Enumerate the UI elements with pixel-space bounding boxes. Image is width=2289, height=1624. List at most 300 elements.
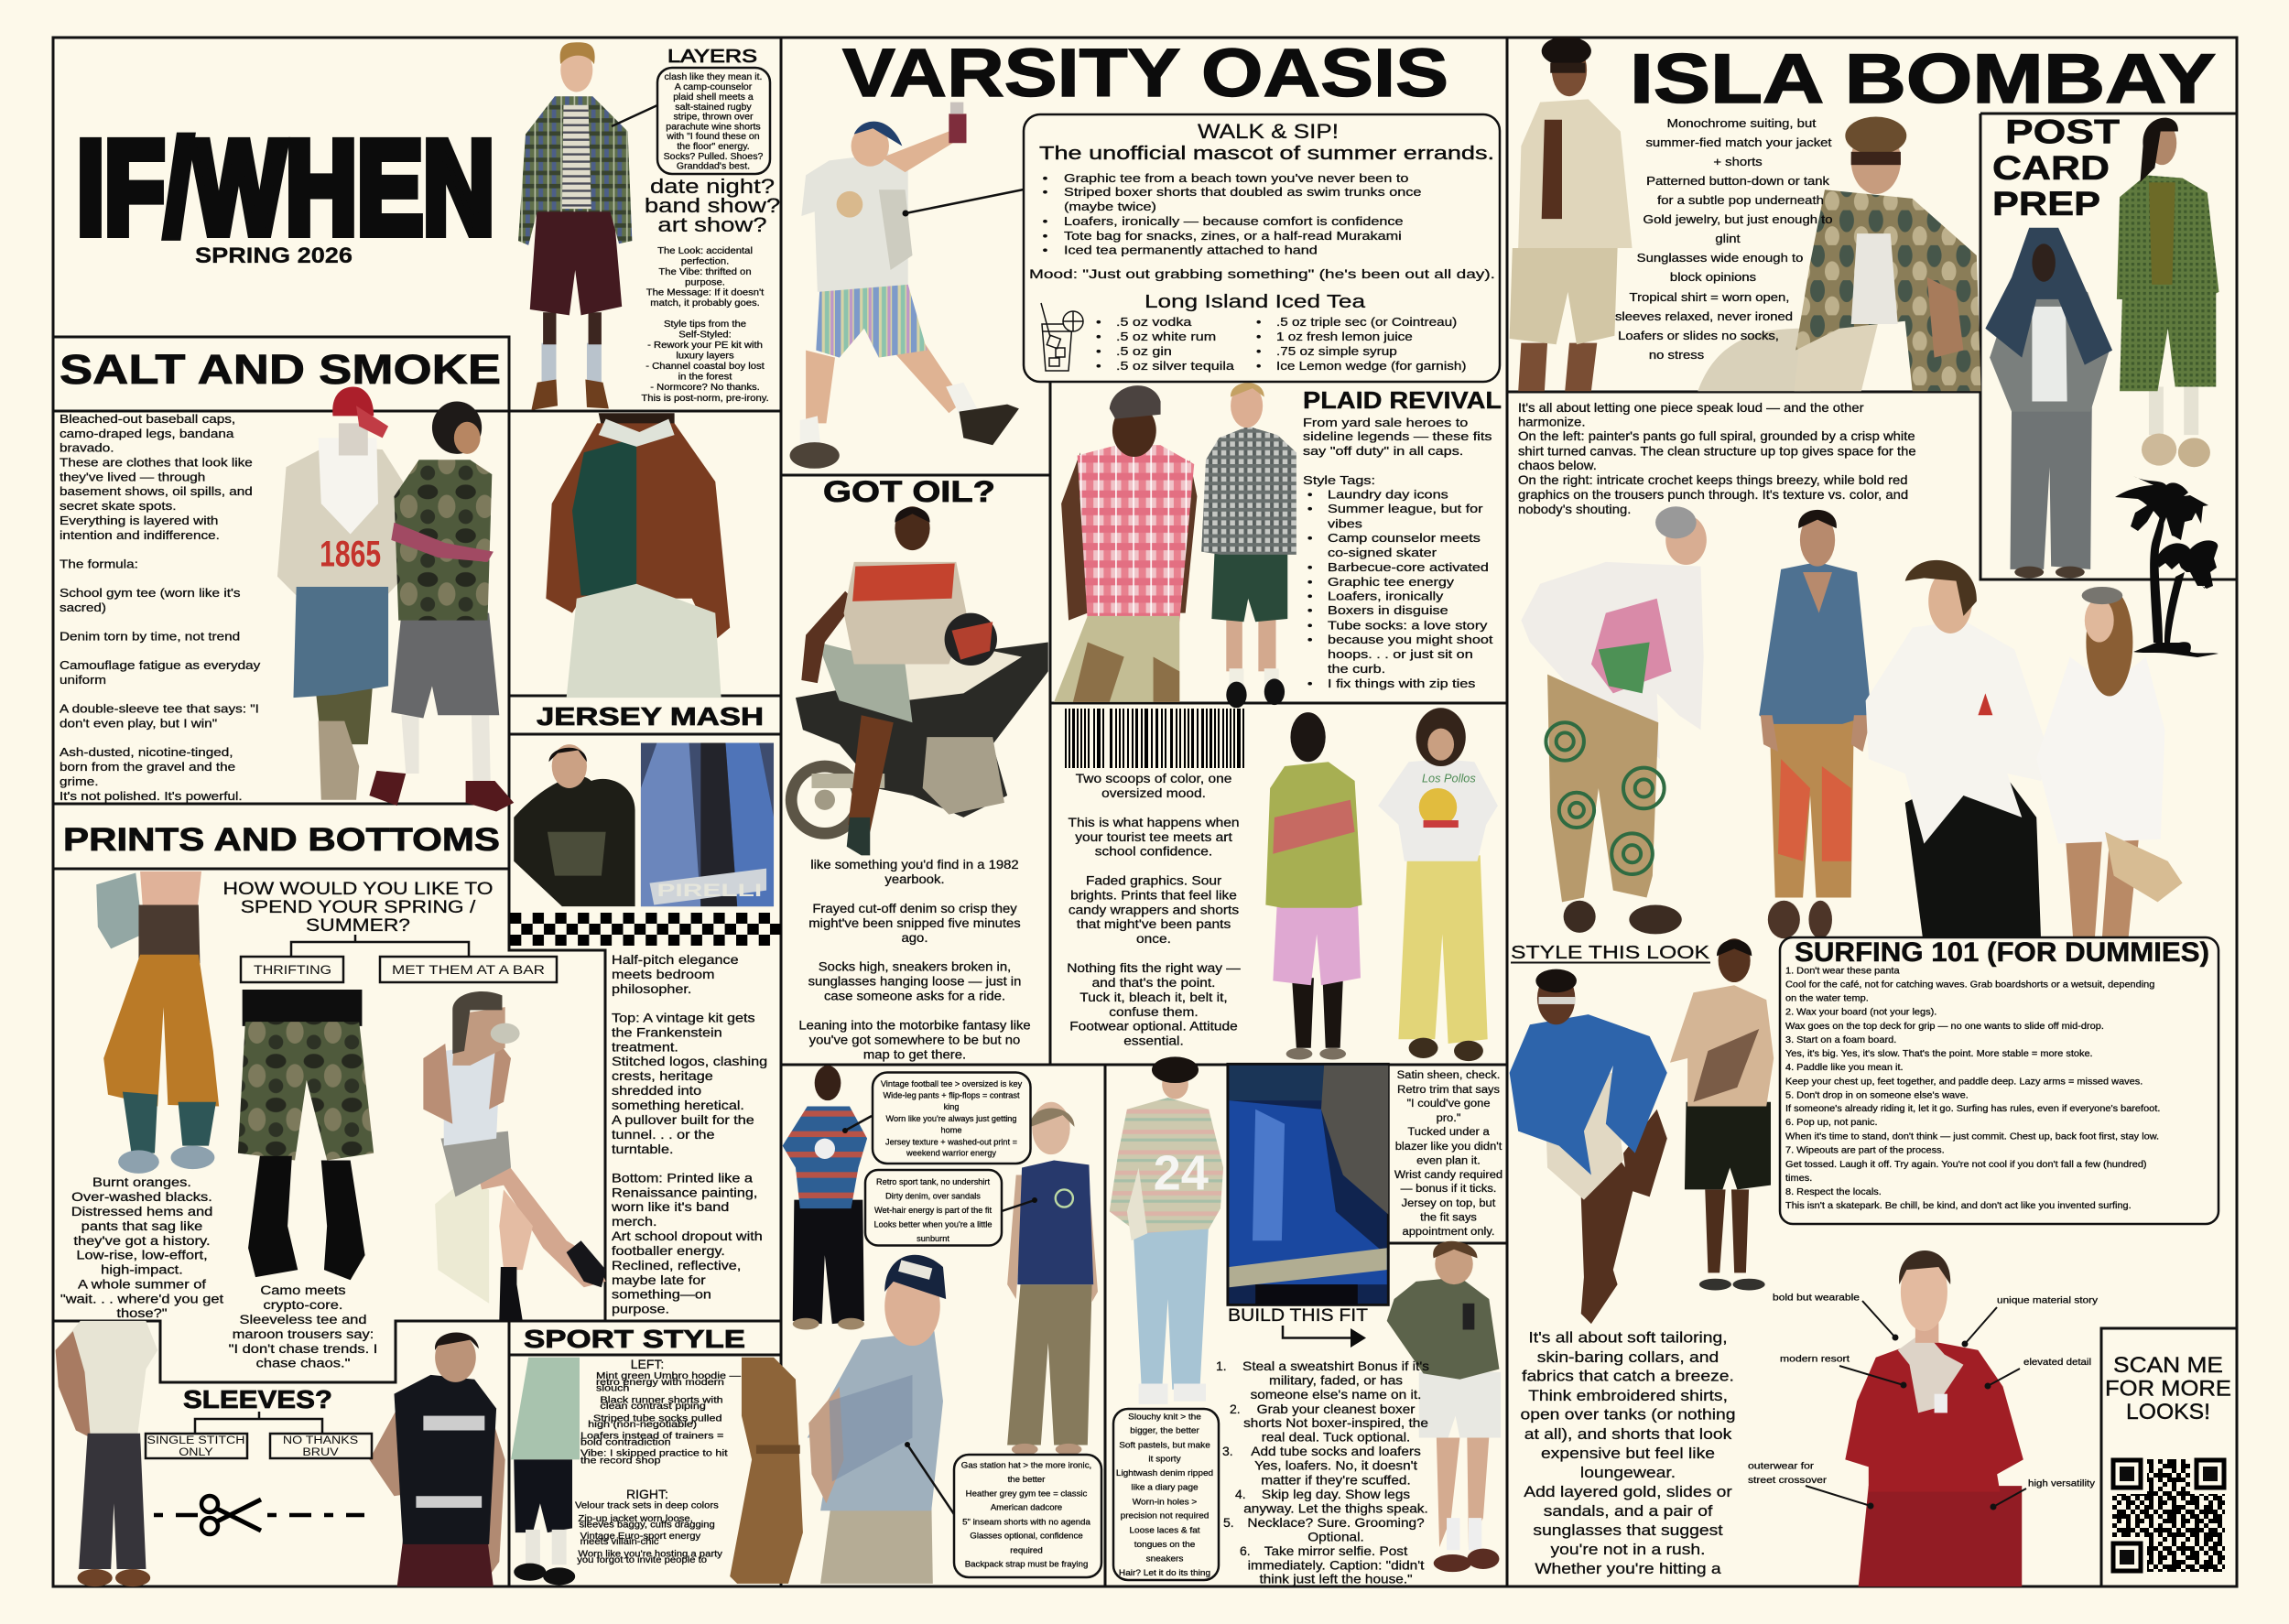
text: salt and smoke body: camo-draped legs, bandana	[60, 428, 233, 441]
text: one piece speak loud: nobody's shouting.	[1518, 503, 1631, 517]
callout: slouchy knit: Hair? Let it do its thing	[1119, 1568, 1210, 1578]
option: no thanks bruv: BRUV	[302, 1445, 339, 1458]
left lines: Striped tube socks pulled	[593, 1414, 721, 1424]
text: soft tailoring: skin-baring collars, and	[1537, 1348, 1719, 1366]
option: met them at a bar: MET THEM AT A BAR	[392, 962, 545, 977]
figure: spiral painted trousers	[1521, 506, 1707, 934]
tips: Keep your chest up, feet together, and paddle deep. Lazy arms = missed waves.	[1785, 1077, 2143, 1087]
text: burnt oranges: "wait. . . where'd you get	[60, 1293, 224, 1306]
heading: post card prep: POST	[2005, 114, 2120, 150]
text: plaid revival body: because you might shoot	[1328, 633, 1492, 647]
text: half-pitch elegance: turntable.	[612, 1143, 674, 1157]
icon: palm trees	[2115, 476, 2218, 657]
callout: retro sport tank: Retro sport tank, no undershirt	[876, 1177, 990, 1186]
text: plaid revival body: the curb.	[1328, 663, 1385, 677]
step numbers: 3.	[1222, 1444, 1233, 1458]
callout: slouchy knit: it sporty	[1148, 1455, 1181, 1464]
left lines: Loafers instead of trainers =	[580, 1432, 724, 1441]
box text: parachute wine shorts	[666, 123, 761, 132]
text: salt and smoke body: uniform	[60, 674, 106, 687]
heading: date night band show art show: band show?	[645, 195, 780, 217]
right lines: Worn like you're hosting a party	[578, 1549, 723, 1559]
text: half-pitch elegance: tunnel. . . or the	[612, 1129, 715, 1142]
text: two scoops: essential.	[1123, 1034, 1184, 1048]
text: satin sheen	[1394, 1068, 1502, 1238]
icon: iced tea glass	[1041, 303, 1083, 371]
text: soft tailoring: at all), and shorts that look	[1524, 1425, 1732, 1443]
text: camo meets crypto-core: crypto-core.	[264, 1298, 342, 1313]
figure: mint hoodie and shorts	[511, 1358, 580, 1586]
panel: surfing 101	[1780, 937, 2218, 1224]
text: soft tailoring: expensive but feel like	[1541, 1445, 1715, 1462]
figure: drinking man with tote	[423, 991, 606, 1321]
text: salt and smoke body: secret skate spots.	[60, 500, 176, 514]
heading: scan me: LOOKS!	[2126, 1400, 2210, 1424]
callout: layers	[612, 47, 770, 174]
option: single stitch only: ONLY	[179, 1445, 213, 1458]
callout: gas station hat	[905, 1442, 1101, 1577]
option: met them at a bar	[380, 957, 557, 982]
text: salt and smoke body: born from the gravel and the	[60, 761, 235, 774]
text: monochrome suiting: block opinions	[1670, 271, 1756, 284]
text: monochrome suiting: for a subtle pop underneath	[1657, 194, 1824, 207]
text: plaid revival body: Tube socks: a love story	[1328, 620, 1488, 633]
step text: someone else's name on it.	[1251, 1389, 1421, 1402]
text: the look and style tips: Self-Styled:	[678, 330, 732, 340]
figure: white shirt and black trousers	[1866, 560, 2051, 937]
step numbers: 4.	[1235, 1487, 1246, 1501]
figure: layers boy in plaid	[518, 42, 632, 410]
text: half-pitch elegance: maybe late for	[612, 1274, 706, 1288]
box text: plaid shell meets a	[673, 93, 754, 103]
text: two scoops: school confidence.	[1095, 845, 1212, 859]
text: the look and style tips: The Vibe: thrifted on	[658, 267, 752, 277]
figure: striped football tee	[783, 1066, 867, 1329]
question: HOW WOULD YOU LIKE TO	[223, 880, 493, 899]
callout: vintage football tee: Wide-leg pants + flip-flops = contrast	[883, 1091, 1020, 1100]
box text: Socks? Pulled. Shoes?	[664, 152, 764, 162]
box text: Granddad's best.	[677, 162, 750, 171]
left lines: slouch	[596, 1384, 629, 1393]
bullets: •	[1043, 186, 1047, 200]
text: satin sheen: — bonus if it ticks.	[1401, 1182, 1496, 1195]
figure: grey plaid shirt and green shorts	[1201, 383, 1296, 708]
text: camo meets crypto-core: Camo meets	[260, 1283, 346, 1298]
text: plaid revival body: •	[1307, 561, 1313, 575]
figure: woman in white blouse with bag	[2036, 587, 2183, 937]
text: burnt oranges: high-impact.	[101, 1263, 183, 1277]
text: salt and smoke body: they've lived — through	[60, 471, 205, 484]
text: monochrome suiting: Tropical shirt = worn open,	[1630, 291, 1789, 304]
text: salt and smoke body: Denim torn by time, not trend	[60, 630, 240, 644]
text: two scoops: Nothing fits the right way —	[1067, 962, 1241, 976]
callout: gas station hat: required	[1010, 1545, 1043, 1554]
heading: varsity oasis: VARSITY OASIS	[842, 35, 1448, 111]
figure: pink plaid sleeveless	[1054, 385, 1197, 702]
text: half-pitch elegance	[611, 954, 767, 1316]
labels: bold but wearable	[1773, 1293, 1860, 1304]
text: half-pitch elegance: Top: A vintage kit gets	[612, 1012, 755, 1025]
heading: jersey mash: JERSEY MASH	[537, 702, 764, 731]
text: got oil body: map to get there.	[863, 1048, 966, 1062]
figure: brown velour tracksuit	[730, 1358, 803, 1584]
text: the look and style tips: perfection.	[681, 256, 729, 266]
step numbers: 1.	[1216, 1359, 1227, 1373]
bullets: Loafers, ironically — because comfort is confidence	[1064, 215, 1404, 229]
finder top-left	[2110, 1457, 2147, 1494]
text: the look and style tips: The Look: accidental	[657, 246, 753, 256]
callout: slouchy knit: tongues on the	[1134, 1540, 1196, 1550]
heading: post card prep: CARD	[1992, 149, 2110, 187]
left lines: Vibe: I skipped practice to hit	[580, 1449, 729, 1458]
option: single stitch only	[146, 1434, 247, 1458]
right lines: Velour track sets in deep colors	[575, 1500, 719, 1510]
text: soft tailoring: Think embroidered shirts,	[1528, 1387, 1728, 1404]
text: burnt oranges: A whole summer of	[78, 1278, 207, 1292]
leader line: walk and sip	[903, 189, 1024, 216]
text: two scoops: oversized mood.	[1101, 787, 1206, 801]
text: satin sheen: Retro trim that says	[1397, 1083, 1500, 1096]
text: half-pitch elegance: purpose.	[612, 1304, 669, 1316]
speech box	[657, 68, 770, 174]
text: two scoops: your tourist tee meets art	[1075, 831, 1232, 845]
text: plaid revival body: •	[1307, 590, 1313, 603]
text: plaid revival body: co-signed skater	[1328, 547, 1437, 560]
figure: blue 93 tank	[1007, 1102, 1098, 1456]
text: salt and smoke body: grime.	[60, 775, 98, 789]
right lines	[575, 1500, 723, 1565]
text: soft tailoring	[1520, 1329, 1736, 1577]
text: salt and smoke body: Ash-dusted, nicotine-tinged,	[60, 746, 233, 760]
text: plaid revival body: Barbecue-core activated	[1328, 561, 1489, 575]
bullets: •	[1043, 244, 1047, 257]
left lines: Black runner shorts with	[600, 1396, 723, 1405]
step text: anyway. Let the thighs speak.	[1243, 1502, 1428, 1516]
finder top-right	[2190, 1457, 2227, 1494]
text: plaid revival body: sideline legends — these fits	[1303, 430, 1492, 444]
text: monochrome suiting: Sunglasses wide enough to	[1637, 252, 1804, 265]
connector	[195, 1412, 322, 1434]
text: camo meets crypto-core: maroon trousers say:	[233, 1327, 374, 1342]
recipe column one: .5 oz gin	[1116, 345, 1172, 359]
tips: on the water temp.	[1785, 994, 1869, 1003]
question: SPEND YOUR SPRING /	[241, 898, 475, 917]
step text: Grab your cleanest boxer	[1257, 1403, 1415, 1417]
figure: football jersey mash-up	[546, 413, 730, 698]
text: soft tailoring: open over tanks (or nothing	[1520, 1406, 1736, 1423]
step text: think just left the house."	[1259, 1573, 1413, 1586]
recipe column two: •	[1256, 345, 1261, 359]
text: salt and smoke body: don't even play, but I win"	[60, 717, 217, 731]
text: sport style right list	[575, 1487, 723, 1565]
text: plaid revival body: •	[1307, 489, 1313, 502]
callout: slouchy knit: sneakers	[1146, 1554, 1184, 1564]
text: two scoops: that might've been pants	[1077, 918, 1231, 932]
tips: If someone's already riding it, let it go. Surfing has rules, even if everyone's barefoot.	[1785, 1104, 2160, 1114]
heading: date night band show art show: art show?	[657, 214, 767, 236]
option: no thanks bruv: NO THANKS	[283, 1434, 358, 1446]
text: the look and style tips	[641, 246, 769, 404]
tips: 2. Wax your board (not your legs).	[1785, 1008, 1936, 1017]
recipe column one	[1096, 316, 1235, 374]
labels	[1748, 1293, 2098, 1489]
tips: 6. Pop up, not panic.	[1785, 1118, 1878, 1128]
figure: blue crochet shirt and orange pants	[1759, 510, 1871, 938]
text: plaid revival body: vibes	[1328, 518, 1362, 531]
leader lines	[1806, 1301, 2026, 1509]
text: burnt oranges: they've got a history.	[73, 1234, 211, 1249]
text: got oil body: yearbook.	[884, 873, 945, 887]
text: plaid revival body: From yard sale heroes to	[1303, 417, 1468, 430]
heading: LAYERS	[667, 47, 757, 67]
box text: the floor" energy.	[677, 142, 750, 152]
text: one piece speak loud: shirt turned canvas. The clean structure up top gives space for the	[1518, 445, 1916, 459]
callout: slouchy knit: bigger, the better	[1130, 1426, 1200, 1435]
bullets: •	[1043, 215, 1047, 229]
step numbers	[1216, 1359, 1251, 1558]
arrow: build this fit	[1283, 1326, 1366, 1348]
leader line	[612, 105, 657, 126]
callout: slouchy knit	[1113, 1409, 1219, 1580]
text: the look and style tips: luxury layers	[676, 351, 734, 361]
text: camo meets crypto-core: "I don't chase trends. I	[229, 1342, 377, 1357]
figure: walking man with iced tea	[790, 103, 1019, 469]
text: half-pitch elegance: treatment.	[612, 1042, 678, 1055]
text: burnt oranges: those?"	[116, 1306, 168, 1321]
text: monochrome suiting: Monochrome suiting, but	[1667, 117, 1817, 130]
tips: 3. Start on a foam board.	[1785, 1035, 1896, 1045]
callout: gas station hat: the better	[1008, 1474, 1045, 1484]
heading: salt and smoke: SALT AND SMOKE	[60, 346, 501, 393]
heading: style this look: STYLE THIS LOOK	[1511, 943, 1710, 963]
text: half-pitch elegance: Bottom: Printed like a	[612, 1173, 754, 1186]
text: the look and style tips: - Channel coastal boy lost	[645, 362, 765, 372]
figure: white tee and dark jeans	[56, 1321, 157, 1586]
text: salt and smoke body: School gym tee (worn like it's	[60, 587, 241, 601]
right lines: Zip-up jacket worn loose,	[578, 1514, 693, 1524]
text: soft tailoring: sunglasses that suggest	[1533, 1521, 1723, 1539]
text: got oil body: you've got somewhere to be but no	[809, 1034, 1020, 1047]
figure: hooded grey tracksuit	[1985, 228, 2112, 578]
box text: clash like they mean it.	[665, 72, 762, 82]
box text: stripe, thrown over	[674, 113, 754, 122]
list: build this fit steps	[1216, 1359, 1429, 1586]
callout: slouchy knit: Lightwash denim ripped	[1116, 1468, 1213, 1478]
text: got oil body: Socks high, sneakers broken in,	[819, 960, 1011, 974]
right lines: meets villain-chic	[580, 1537, 659, 1547]
text: salt and smoke body: Bleached-out baseball caps,	[60, 413, 235, 427]
logo wordmark: IF/WHEN	[77, 114, 494, 262]
tips: 7. Wipeouts are part of the process.	[1785, 1146, 1945, 1155]
text: half-pitch elegance: something heretical.	[612, 1099, 744, 1113]
text: camo meets crypto-core: Sleeveless tee and	[239, 1313, 367, 1327]
step numbers: 6.	[1240, 1543, 1251, 1558]
season: SPRING 2026	[195, 244, 353, 268]
text: satin sheen: Satin sheen, check.	[1397, 1068, 1500, 1081]
text: one piece speak loud: It's all about letting one piece speak loud — and the other	[1518, 402, 1864, 416]
text: salt and smoke body: sacred)	[60, 601, 106, 615]
text: plaid revival body: Style Tags:	[1303, 474, 1375, 488]
text: plaid revival body: •	[1307, 532, 1313, 546]
option: thrifting: THRIFTING	[254, 962, 331, 977]
text: half-pitch elegance: Renaissance painting,	[612, 1187, 757, 1200]
text: camo meets crypto-core	[229, 1283, 377, 1370]
heading: scan me	[2105, 1353, 2231, 1424]
text: burnt oranges: Distressed hems and	[71, 1205, 212, 1219]
callout: slouchy knit: Loose laces & fat	[1129, 1526, 1200, 1535]
callout: gas station hat: American dadcore	[991, 1502, 1062, 1511]
callout: retro sport tank: Looks better when you're a little	[874, 1219, 992, 1229]
QR code	[2110, 1457, 2227, 1574]
text: salt and smoke body: Camouflage fatigue as everyday	[60, 659, 261, 673]
step text: Yes, loafers. No, it doesn't	[1254, 1459, 1417, 1473]
left label: LEFT:	[631, 1357, 664, 1371]
text: got oil body: ago.	[902, 932, 928, 946]
labels: high versatility	[2028, 1479, 2095, 1489]
labels: modern resort	[1780, 1355, 1850, 1364]
finder bottom-left	[2110, 1537, 2147, 1574]
text: soft tailoring: loungewear.	[1580, 1464, 1676, 1481]
callout: slouchy knit: Worn-in holes >	[1133, 1498, 1198, 1507]
step text: Skip leg day. Show legs	[1262, 1489, 1410, 1502]
text: plaid revival body: hoops. . . or just sit on	[1328, 648, 1473, 662]
icon: scissors and cut line	[154, 1492, 364, 1534]
labels: elevated detail	[2023, 1358, 2091, 1368]
annotations: red polo	[1748, 1293, 2098, 1509]
text: two scoops: Tuck it, bleach it, belt it,	[1079, 991, 1228, 1005]
callout: slouchy knit: like a diary page	[1131, 1483, 1199, 1492]
text: the look and style tips: The Message: If it doesn't	[646, 287, 764, 298]
tips: Cool for the café, not for catching waves. Grab boardshorts or a wetsuit, depending	[1785, 980, 2155, 990]
photo: leather jacket look	[514, 744, 635, 906]
heading: got oil: GOT OIL?	[823, 475, 995, 508]
text: plaid revival body: Camp counselor meets	[1328, 532, 1481, 546]
tips: This isn't a skatepark. Be chill, be kind, and don't act like you invented surfing.	[1785, 1201, 2132, 1211]
text: plaid revival body: I fix things with zip ties	[1328, 677, 1475, 691]
callout: retro sport tank	[865, 1170, 1037, 1245]
text: plaid revival body	[1303, 417, 1492, 691]
right lines: sleeves baggy, cuffs dragging	[580, 1520, 715, 1530]
text: plaid revival body: Boxers in disguise	[1328, 604, 1448, 618]
bullets: •	[1043, 230, 1047, 244]
text: half-pitch elegance: meets bedroom	[612, 969, 715, 982]
step text: Add tube socks and loafers	[1251, 1445, 1421, 1459]
text: burnt oranges: Over-washed blacks.	[71, 1190, 212, 1205]
text: monochrome suiting: Gold jewelry, but just enough to	[1644, 213, 1833, 226]
photo: blue satin shorts box	[1228, 1064, 1388, 1305]
connector	[291, 935, 469, 957]
callout: slouchy knit: Slouchy knit > the	[1128, 1413, 1201, 1422]
recipe column two: •	[1256, 360, 1261, 374]
text: the look and style tips: - Rework your PE kit with	[647, 341, 763, 351]
callout: vintage football tee	[842, 1073, 1031, 1164]
right label: RIGHT:	[626, 1487, 668, 1501]
left lines: high (non-negotiable)	[588, 1420, 697, 1430]
text: two scoops: brights. Prints that feel like	[1070, 889, 1237, 903]
step text: Necklace? Sure. Grooming?	[1247, 1517, 1425, 1531]
figure: 24 knit sweater and jeans: 24	[1154, 1145, 1209, 1200]
text: got oil body	[798, 859, 1031, 1062]
heading: post card prep	[1992, 114, 2120, 222]
text: half-pitch elegance: Art school dropout with	[612, 1230, 763, 1244]
text: salt and smoke body: intention and indifference.	[60, 529, 220, 543]
text: burnt oranges	[60, 1175, 224, 1321]
figure: white tee and yellow trousers: Los Pollos	[1422, 772, 1476, 785]
text: one piece speak loud: On the right: intricate crochet keeps things breezy, while bold red	[1518, 474, 1908, 488]
figure: white tee and yellow trousers	[1378, 708, 1498, 1061]
text: plaid revival body: Summer league, but for	[1328, 503, 1483, 516]
subtitle: The unofficial mascot of summer errands.	[1039, 144, 1494, 164]
text: got oil body: like something you'd find in a 1982	[810, 859, 1019, 872]
title: WALK & SIP!	[1198, 120, 1339, 143]
bullets	[1043, 172, 1421, 257]
tips	[1785, 967, 2160, 1211]
recipe column one: .5 oz vodka	[1116, 316, 1192, 330]
text: soft tailoring: sandals, and a pair of	[1544, 1502, 1713, 1520]
text: two scoops: candy wrappers and shorts	[1069, 904, 1239, 917]
text: two scoops: This is what happens when	[1068, 817, 1240, 830]
labels: unique material story	[1997, 1296, 2098, 1305]
left lines	[580, 1371, 742, 1466]
step text: Optional.	[1307, 1531, 1364, 1544]
callout: gas station hat: Backpack strap must be fraying	[965, 1559, 1088, 1568]
text: plaid revival body: •	[1307, 604, 1313, 618]
bullets: Graphic tee from a beach town you've never been to	[1064, 172, 1408, 186]
figure: lime tee and pink shorts	[1265, 712, 1362, 1060]
heading: sport style: SPORT STYLE	[524, 1325, 745, 1353]
text: satin sheen: blazer like you didn't	[1395, 1140, 1502, 1153]
flowchart: sleeves	[146, 1385, 372, 1458]
text: plaid revival body: Graphic tee energy	[1328, 576, 1455, 590]
question: SUMMER?	[306, 916, 410, 936]
masthead: IF/WHEN	[77, 114, 494, 268]
recipe title: Long Island Iced Tea	[1144, 292, 1366, 312]
step text	[1242, 1360, 1429, 1586]
text: salt and smoke body: A double-sleeve tee that says: "I	[60, 702, 259, 716]
tips: 1. Don't wear these panta	[1785, 967, 1900, 976]
text: monochrome suiting: sleeves relaxed, never ironed	[1615, 310, 1793, 323]
figure: crouching blue shirt man	[1510, 969, 1667, 1324]
labels: outerwear for	[1748, 1461, 1815, 1472]
tips: Yes, it's big. Yes, it's slow. That's the point. More stable = more stoke.	[1785, 1049, 2093, 1059]
text: one piece speak loud: harmonize.	[1518, 416, 1585, 429]
heading: plaid revival: PLAID REVIVAL	[1303, 386, 1502, 414]
photo: blue striped pirelli jersey: PIRELLI	[656, 882, 762, 901]
text: satin sheen: pro."	[1437, 1111, 1460, 1124]
heading: date night band show art show: date night?	[650, 176, 775, 198]
text: monochrome suiting: + shorts	[1713, 156, 1763, 168]
tips: Wax goes on the top deck for grip — no one wants to slide off mid-drop.	[1785, 1022, 2104, 1032]
panel: walk and sip	[1024, 114, 1500, 382]
bullets: Tote bag for snacks, zines, or a half-read Murakami	[1064, 230, 1402, 244]
text: the look and style tips: in the forest	[678, 372, 732, 382]
text: the look and style tips: Style tips from the	[664, 319, 746, 330]
text: half-pitch elegance: crests, heritage	[612, 1070, 713, 1084]
heading: build this fit: BUILD THIS FIT	[1228, 1306, 1368, 1326]
figure: beige shirt and black shorts	[1670, 938, 1774, 1290]
text: monochrome suiting: Loafers or slides no socks,	[1618, 330, 1779, 342]
callout: retro sport tank: Dirty denim, over sandals	[885, 1192, 981, 1201]
callout: vintage football tee: king	[944, 1102, 959, 1111]
text: one piece speak loud: graphics on the trousers punch through. It's texture vs. color, and	[1518, 489, 1908, 503]
figure: cream jacket and shorts	[1510, 37, 1633, 391]
figure: olive sweatshirt mirror selfie	[1387, 1241, 1501, 1572]
bullets: Striped boxer shorts that doubled as swim trunks once	[1064, 186, 1421, 200]
text: got oil body: Frayed cut-off denim so crisp they	[812, 903, 1018, 916]
text: half-pitch elegance: merch.	[612, 1216, 657, 1229]
callout: retro sport tank: sunburnt	[917, 1234, 949, 1243]
text: sport style left list	[580, 1357, 742, 1466]
